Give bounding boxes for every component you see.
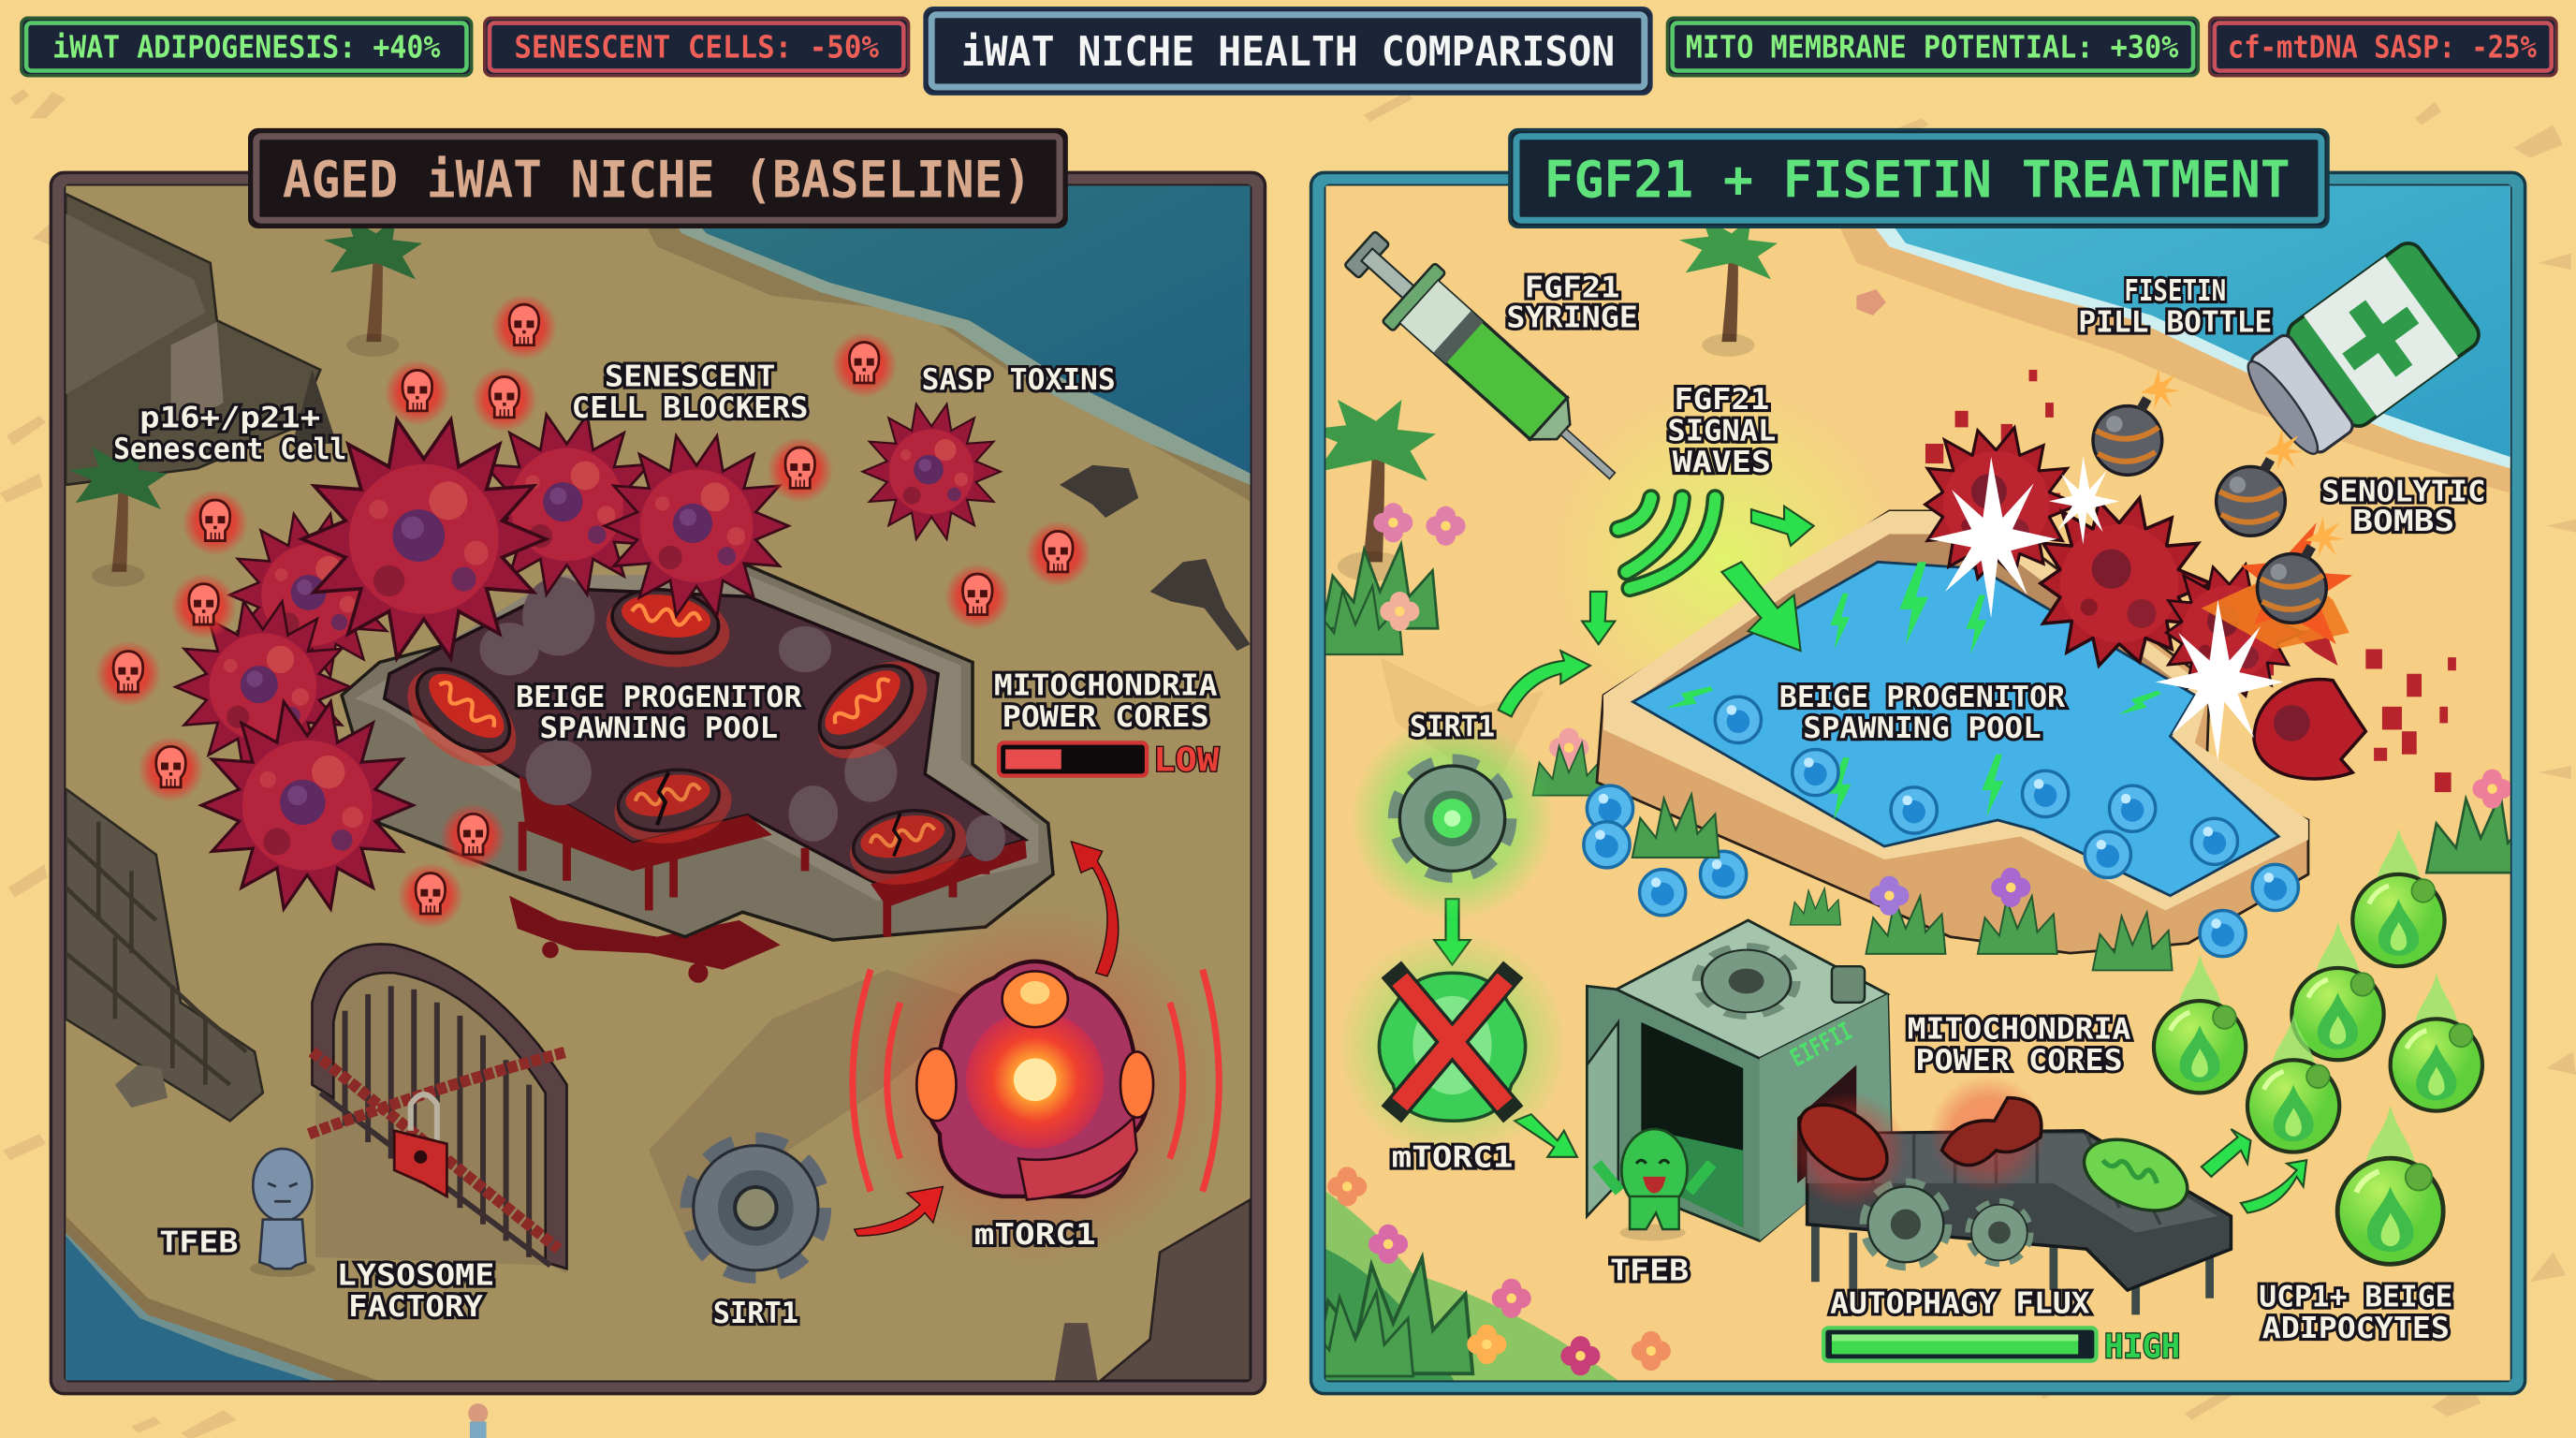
labels: treatment <box>1392 271 2485 1345</box>
scene: treated ground and water <box>1325 185 2510 1381</box>
labels: aged niche: MITOCHONDRIA <box>994 669 1218 703</box>
top stat: cf-mtDNA SASP: cf-mtDNA SASP: -25% <box>2228 29 2537 65</box>
icon: inhibited mTORC1 <box>1338 931 1567 1160</box>
low power bar <box>999 741 1220 779</box>
top stat: mito membrane potential: MITO MEMBRANE POTENTIAL: +30% <box>1686 29 2179 65</box>
heading: aged niche <box>250 130 1066 227</box>
labels: aged niche: SPAWNING POOL <box>540 712 778 745</box>
palm trees and flowers <box>1308 217 2535 873</box>
top stat: senescent cells <box>485 18 909 76</box>
labels: treatment: TFEB <box>1610 1254 1689 1287</box>
palm trees <box>69 217 422 587</box>
icon: senolytic bombs <box>2093 368 2345 623</box>
labels: aged niche: CELL BLOCKERS <box>572 391 809 425</box>
labels: treatment: FGF21 <box>1525 271 1620 305</box>
icon: exploding senescent cells <box>1925 370 2456 792</box>
rocky cliff bottom-right <box>1055 1199 1251 1381</box>
icon: lysosome factory <box>1587 920 1891 1240</box>
labels: treatment: SPAWNING POOL <box>1803 712 2042 745</box>
ruined stone wall top-left <box>66 194 337 485</box>
labels: treatment: SYRINGE <box>1506 301 1638 334</box>
labels: treatment: ADIPOCYTES <box>2262 1312 2450 1345</box>
icon: locked lysosome gate <box>309 944 567 1273</box>
labels: treatment: mTORC1 <box>1392 1140 1513 1174</box>
arrows: green signal flow <box>1434 506 2306 1213</box>
low power bar: LOW <box>1153 741 1220 779</box>
top stat: mito membrane potential <box>1667 18 2198 76</box>
icon: overactive mTORC1 <box>853 907 1219 1262</box>
scene: aged ground and water <box>66 185 1251 1381</box>
labels: treatment: SIRT1 <box>1410 710 1495 743</box>
icon: sad TFEB <box>250 1149 315 1277</box>
main title: iWAT NICHE HEALTH COMPARISON <box>961 28 1615 76</box>
heading: treatment: FGF21 + FISETIN TREATMENT <box>1544 150 2291 210</box>
blood puddle <box>509 896 861 983</box>
labels: treatment: SIGNAL <box>1667 414 1776 448</box>
labels: aged niche: SIRT1 <box>713 1297 798 1330</box>
icon: lysosome factory: EIFFII <box>1786 1018 1857 1073</box>
icon: FGF21 signal waves <box>1618 498 1715 588</box>
top stat: iWAT adipogenesis: iWAT ADIPOGENESIS: +40% <box>52 29 441 65</box>
top stat: senescent cells: SENESCENT CELLS: -50% <box>514 29 879 65</box>
labels: treatment: MITOCHONDRIA <box>1908 1012 2130 1046</box>
labels: treatment: SENOLYTIC <box>2321 475 2485 508</box>
blue spawning pool <box>1584 511 2308 970</box>
labels: treatment: POWER CORES <box>1915 1044 2123 1078</box>
labels: aged niche: FACTORY <box>348 1290 484 1324</box>
labels: treatment: BOMBS <box>2352 505 2454 538</box>
labels: aged niche: Senescent Cell <box>113 433 346 466</box>
dark spawning pool <box>342 565 1053 940</box>
labels: treatment: BEIGE PROGENITOR <box>1779 681 2066 714</box>
top stat: iWAT adipogenesis <box>22 18 472 76</box>
labels: treatment: FISETIN <box>2124 274 2226 308</box>
high autophagy bar <box>1823 1328 2180 1366</box>
labels: aged niche <box>113 360 1218 1330</box>
labels: aged niche: LYSOSOME <box>337 1259 494 1293</box>
labels: treatment: WAVES <box>1673 446 1771 479</box>
arrow: SIRT1 to mTORC1 <box>855 1186 943 1236</box>
labels: aged niche: TFEB <box>159 1226 238 1260</box>
arrow: mTORC1 to power cores <box>1071 842 1119 976</box>
labels: aged niche: mTORC1 <box>974 1218 1096 1252</box>
icon: SASP toxin skulls <box>95 294 1090 929</box>
icon: autophagy conveyor <box>1786 1075 2231 1314</box>
icon: UCP1+ beige adipocytes <box>2154 829 2482 1264</box>
panel: aged iWAT niche baseline <box>51 172 1265 1394</box>
icon: senescent cells <box>175 404 1001 909</box>
labels: treatment: AUTOPHAGY FLUX <box>1830 1287 2090 1321</box>
dark boulders <box>1060 465 1251 651</box>
labels: treatment: PILL BOTTLE <box>2078 306 2272 340</box>
labels: aged niche: BEIGE PROGENITOR <box>516 681 802 714</box>
main title <box>925 8 1651 94</box>
top stat: cf-mtDNA SASP <box>2210 18 2556 76</box>
icon: FGF21 syringe <box>1333 219 1639 505</box>
panel: FGF21 + fisetin treatment <box>1297 172 2535 1394</box>
icon: fisetin pill bottle <box>2235 238 2484 466</box>
heading: treatment <box>1510 130 2328 227</box>
ruined stone wall bottom-left <box>66 789 263 1121</box>
high autophagy bar: HIGH <box>2104 1328 2180 1366</box>
labels: aged niche: SENESCENT <box>605 360 775 394</box>
labels: treatment: UCP1+ BEIGE <box>2259 1281 2452 1314</box>
garden bottom-left <box>1297 1167 1671 1381</box>
tiny figure at bottom <box>468 1403 488 1438</box>
icon: happy TFEB <box>1597 1129 1712 1240</box>
labels: aged niche: SASP TOXINS <box>922 363 1116 397</box>
labels: aged niche: p16+/p21+ <box>139 401 320 434</box>
labels: treatment: FGF21 <box>1674 383 1769 417</box>
icon: grey SIRT1 gear <box>694 1146 818 1270</box>
heading: aged niche: AGED iWAT NICHE (BASELINE) <box>283 150 1032 210</box>
icon: activated SIRT1 gear <box>1351 716 1554 920</box>
labels: aged niche: POWER CORES <box>1003 700 1209 734</box>
